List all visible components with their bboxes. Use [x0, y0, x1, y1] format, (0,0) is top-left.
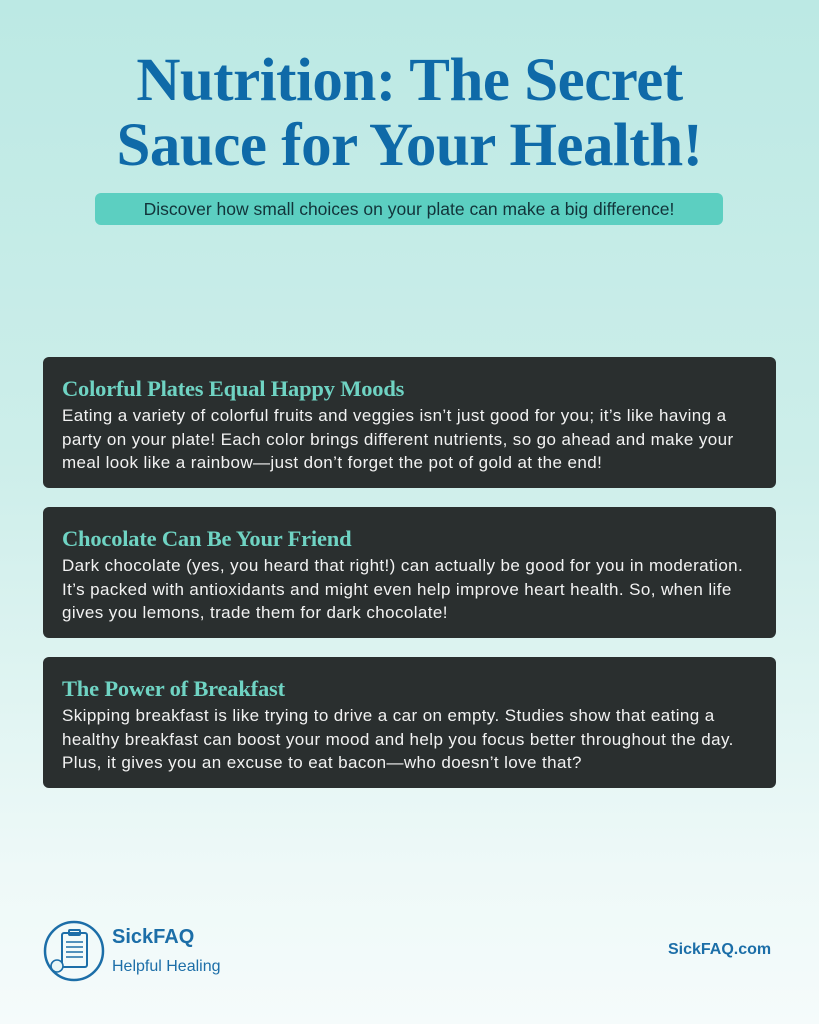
icon: clipboard [44, 920, 104, 982]
heading: The Power of Breakfast [62, 676, 285, 701]
title: Sauce for Your Health! [116, 112, 702, 179]
title: Nutrition: The Secret [136, 47, 683, 114]
subtitle banner [95, 193, 723, 225]
panel: breakfast [43, 657, 776, 788]
text block: Plus, it gives you an excuse to eat bacon—who doesn’t love that? [62, 753, 582, 772]
heading: Colorful Plates Equal Happy Moods [62, 376, 404, 401]
heading: Chocolate Can Be Your Friend [62, 526, 351, 551]
text block: healthy breakfast can boost your mood and help you focus better throughout the day. [62, 730, 734, 748]
text block: Eating a variety of colorful fruits and veggies isn’t just good for you; it’s like having a [62, 406, 726, 425]
text block [62, 706, 734, 772]
website url: SickFAQ.com [668, 941, 771, 958]
panel: colorful plates [43, 357, 776, 488]
text block [62, 556, 743, 622]
title [116, 47, 702, 179]
text block: meal look like a rainbow—just don’t forget the pot of gold at the end! [62, 453, 602, 472]
text block: Skipping breakfast is like trying to drive a car on empty. Studies show that eating a [62, 706, 715, 725]
text block [62, 406, 734, 472]
brand logo block [44, 920, 221, 982]
brand name: SickFAQ [112, 926, 194, 948]
subtitle banner: Discover how small choices on your plate can make a big difference! [144, 199, 674, 219]
text block: gives you lemons, trade them for dark chocolate! [62, 603, 448, 622]
text block: party on your plate! Each color brings different nutrients, so go ahead and make your [62, 430, 734, 448]
tagline: Helpful Healing [112, 958, 221, 975]
panel: chocolate [43, 507, 776, 638]
text block: It’s packed with antioxidants and might even help improve heart health. So, when life [62, 580, 732, 598]
text block: Dark chocolate (yes, you heard that right!) can actually be good for you in moderation. [62, 556, 743, 575]
